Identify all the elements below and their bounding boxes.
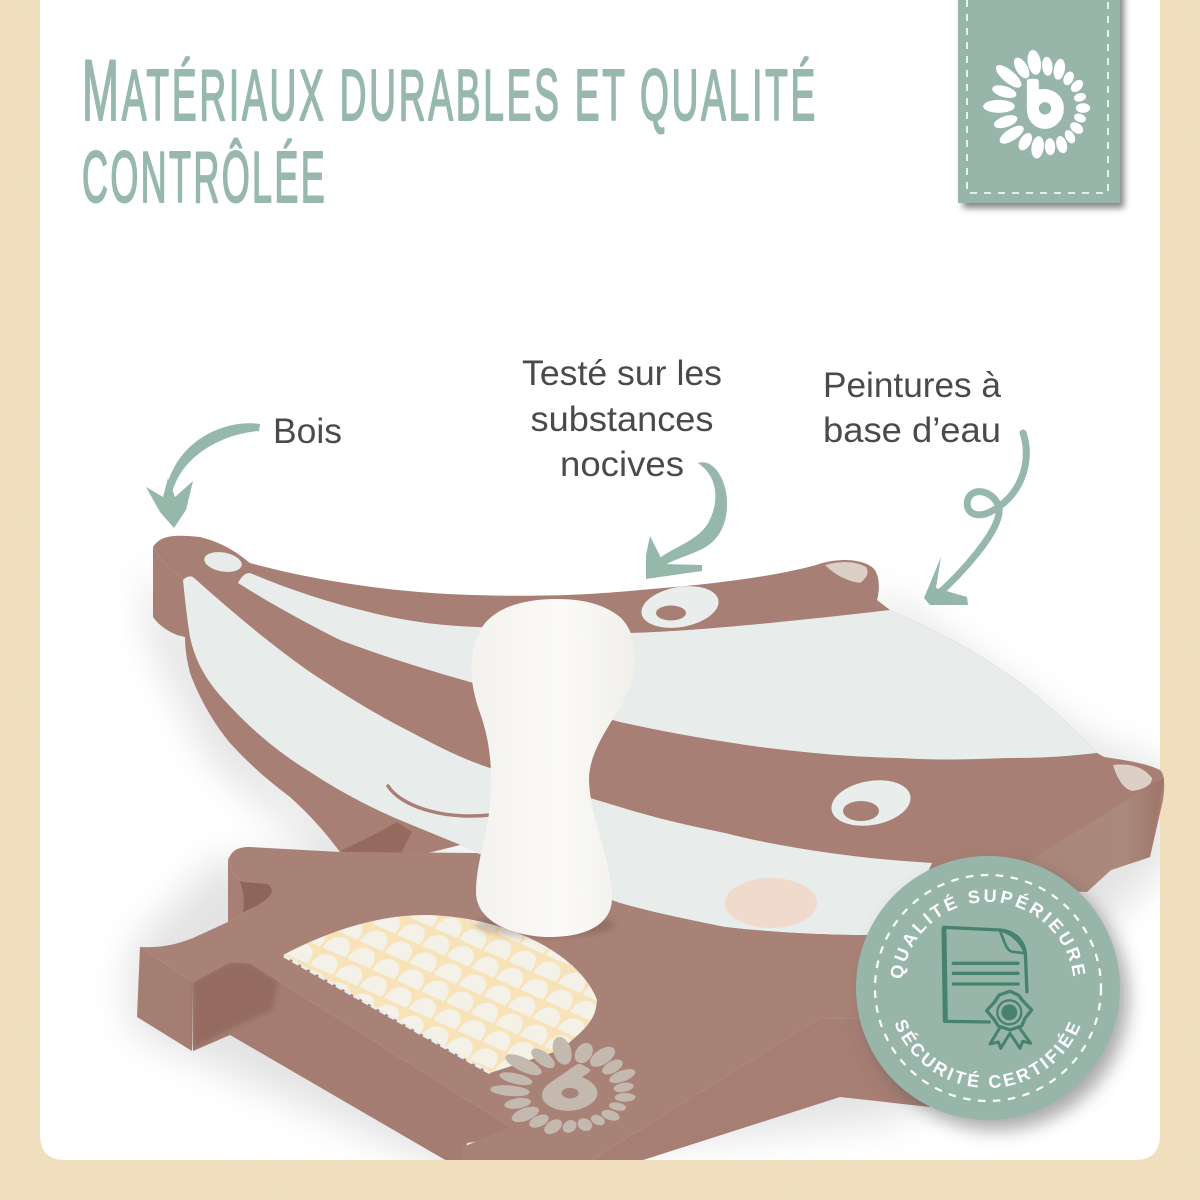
icon: brand logo (984, 49, 1090, 159)
knob shadow (475, 913, 615, 937)
printed logo (490, 1036, 636, 1134)
product: wooden badger hook (130, 536, 1170, 1165)
label: Bois: Bois (273, 412, 342, 451)
head right side (1070, 778, 1164, 892)
lower eye (831, 780, 911, 826)
smile (388, 786, 490, 816)
label: Testé sur les substances nocives: Testé sur les (522, 354, 722, 393)
body long wall (193, 962, 510, 1161)
label: Peintures à base d'eau (823, 366, 1002, 450)
title (82, 43, 818, 218)
head side wall (153, 547, 480, 860)
ears (825, 562, 1152, 791)
nose (725, 878, 817, 928)
label: Peintures à base d'eau: base d’eau (823, 411, 1001, 450)
badge text bottom: SÉCURITÉ CERTIFIÉE (896, 1020, 1080, 1088)
white upper stripe (238, 573, 1097, 760)
knob (471, 599, 635, 937)
badge text top: QUALITÉ SUPÉRIEURE (890, 889, 1086, 978)
notch dark (240, 881, 272, 912)
body lower right (590, 1018, 930, 1161)
title: CONTRÔLÉE (82, 137, 327, 218)
badge: quality seal (856, 856, 1139, 1141)
white cheek (183, 576, 932, 935)
notch shade (340, 822, 412, 852)
arrow: Bois (146, 423, 260, 528)
label: Testé sur les substances nocives: substances (530, 400, 714, 439)
ear side wall (228, 860, 272, 922)
small eye (204, 552, 242, 572)
label: Testé sur les substances nocives: nocives (560, 445, 684, 484)
label: Peintures à base d'eau: Peintures à (823, 366, 1002, 405)
inner corner glare (193, 962, 278, 1048)
icon: certificate (944, 927, 1032, 1048)
yellow pattern belly (283, 915, 597, 1073)
arrow: Testé (646, 462, 727, 579)
arrow: Peintures (924, 433, 1026, 605)
brand tag (958, 0, 1124, 208)
title: MATÉRIAUX DURABLES ET QUALITÉ (82, 43, 818, 139)
upper eye (641, 586, 718, 628)
product shadow (130, 560, 1170, 1165)
arm front wall (137, 947, 193, 1051)
head top face (153, 536, 1164, 950)
body top face (140, 847, 862, 1160)
label: Testé sur les substances nocives (522, 354, 722, 484)
